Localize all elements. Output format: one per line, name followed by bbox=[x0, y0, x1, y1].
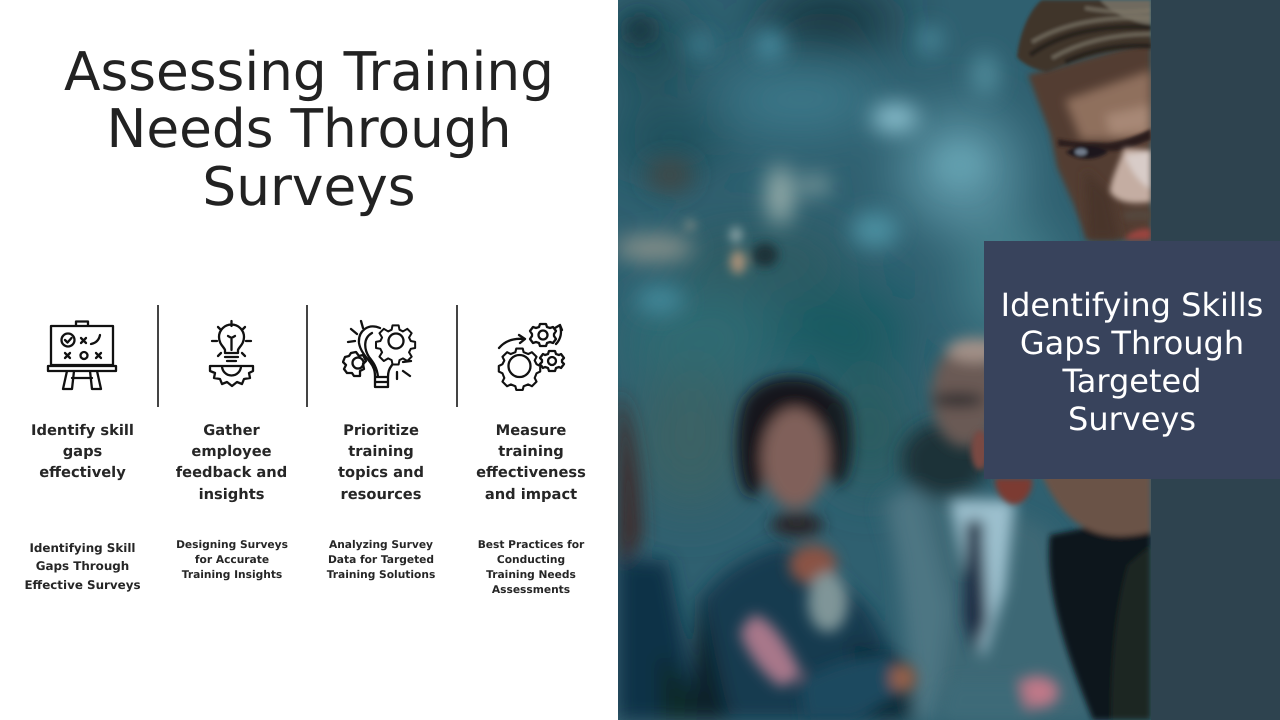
title: Needs Through bbox=[106, 98, 512, 160]
text: column 4: Training Needs bbox=[486, 568, 576, 580]
heading: column 2: employee bbox=[191, 443, 272, 460]
title: Assessing Training bbox=[64, 40, 554, 102]
callout box bbox=[984, 241, 1280, 479]
heading: column 4: training bbox=[498, 443, 564, 460]
text: column 1: Effective Surveys bbox=[24, 578, 141, 592]
man head and shirt bbox=[931, 343, 999, 447]
icon: strategy board bbox=[46, 320, 118, 390]
heading: column 3: training bbox=[348, 443, 414, 460]
heading: column 2: Gather bbox=[203, 422, 260, 438]
callout text: Gaps Through bbox=[1020, 324, 1244, 362]
photo: blurred team with man in foreground bbox=[618, 0, 1151, 720]
side band bbox=[1151, 0, 1280, 720]
text: column 1: Identifying Skill bbox=[29, 541, 136, 555]
text: column 2: Training Insights bbox=[182, 568, 282, 580]
heading: column 3: Prioritize bbox=[343, 422, 419, 438]
man in suit bbox=[880, 482, 1095, 720]
heading: column 4: and impact bbox=[485, 486, 577, 503]
callout text: Surveys bbox=[1068, 400, 1196, 438]
text: column 3 bbox=[326, 538, 435, 580]
heading: column 4: Measure bbox=[496, 422, 566, 438]
nose and mouth bbox=[1110, 148, 1151, 240]
text: column 4: Assessments bbox=[492, 582, 570, 596]
text: column 3: Data for Targeted bbox=[328, 552, 434, 566]
woman head bbox=[746, 377, 838, 433]
divider bbox=[157, 305, 158, 407]
text: column 2: Designing Surveys bbox=[176, 538, 288, 550]
heading: column 3 bbox=[338, 422, 424, 503]
heading: column 4: effectiveness bbox=[476, 464, 586, 481]
heading: column 1: gaps bbox=[63, 443, 102, 460]
background texture bbox=[610, 0, 1060, 510]
brow, eye bbox=[1058, 129, 1151, 151]
heading: column 2 bbox=[176, 422, 287, 503]
icon: light bulb and gear bbox=[208, 320, 254, 388]
blurred colleagues bbox=[618, 390, 1095, 720]
foreground man's head bbox=[1028, 40, 1151, 240]
callout text bbox=[1001, 286, 1263, 438]
text: column 3: Analyzing Survey bbox=[329, 538, 433, 550]
text: column 4 bbox=[478, 538, 584, 596]
heading: column 2: feedback and bbox=[176, 464, 287, 481]
heading: column 3: topics and bbox=[338, 464, 424, 481]
text: column 3: Training Solutions bbox=[327, 568, 435, 580]
title bbox=[64, 40, 554, 218]
callout text: Identifying Skills bbox=[1001, 286, 1263, 324]
text: column 4: Conducting bbox=[497, 552, 565, 566]
heading: column 1: Identify skill bbox=[31, 422, 134, 438]
text: column 1: Gaps Through bbox=[36, 559, 129, 573]
heading: column 1 bbox=[31, 422, 134, 481]
icon: gears with arrows bbox=[498, 322, 566, 391]
man's raised hand bbox=[971, 430, 1151, 720]
woman body bbox=[700, 545, 930, 720]
callout text: Targeted bbox=[1062, 362, 1202, 400]
divider bbox=[456, 305, 458, 407]
text: column 1 bbox=[24, 541, 141, 592]
icon: bulb with gears bbox=[342, 320, 416, 388]
title: Surveys bbox=[202, 156, 416, 218]
text: column 2 bbox=[176, 538, 288, 580]
far left figure bbox=[618, 390, 642, 570]
heading: column 3: resources bbox=[340, 486, 421, 503]
text: column 2: for Accurate bbox=[195, 552, 269, 566]
hair bbox=[1017, 0, 1151, 72]
heading: column 4 bbox=[476, 422, 586, 503]
heading: column 1: effectively bbox=[39, 464, 126, 481]
divider bbox=[306, 305, 308, 407]
heading: column 2: insights bbox=[199, 486, 264, 503]
text: column 4: Best Practices for bbox=[478, 538, 584, 550]
